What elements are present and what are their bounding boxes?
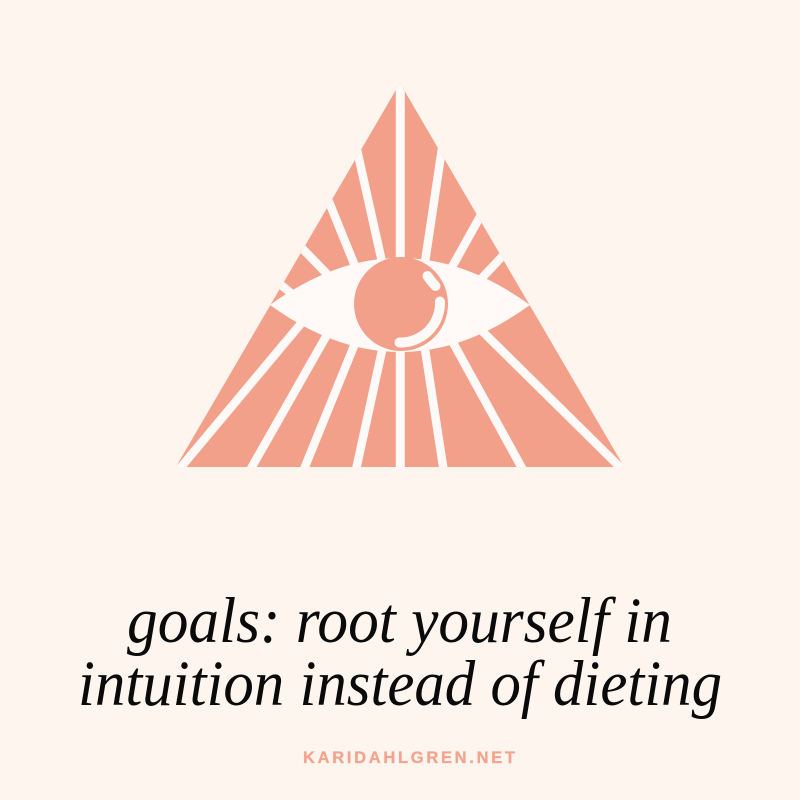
iris highlight: long arc <box>400 302 440 343</box>
eye white <box>270 258 530 352</box>
triangle <box>177 83 623 467</box>
rays of light <box>171 70 632 480</box>
iris <box>354 257 448 351</box>
icon: triangle with radiating eye <box>171 70 632 480</box>
title <box>78 585 722 720</box>
infographic canvas <box>81 83 720 764</box>
website credit: KARIDAHLGREN.NET <box>303 749 515 767</box>
title: intuition instead of dieting <box>78 648 722 720</box>
title: goals: root yourself in <box>127 585 672 657</box>
iris highlight: short arc <box>428 276 436 286</box>
